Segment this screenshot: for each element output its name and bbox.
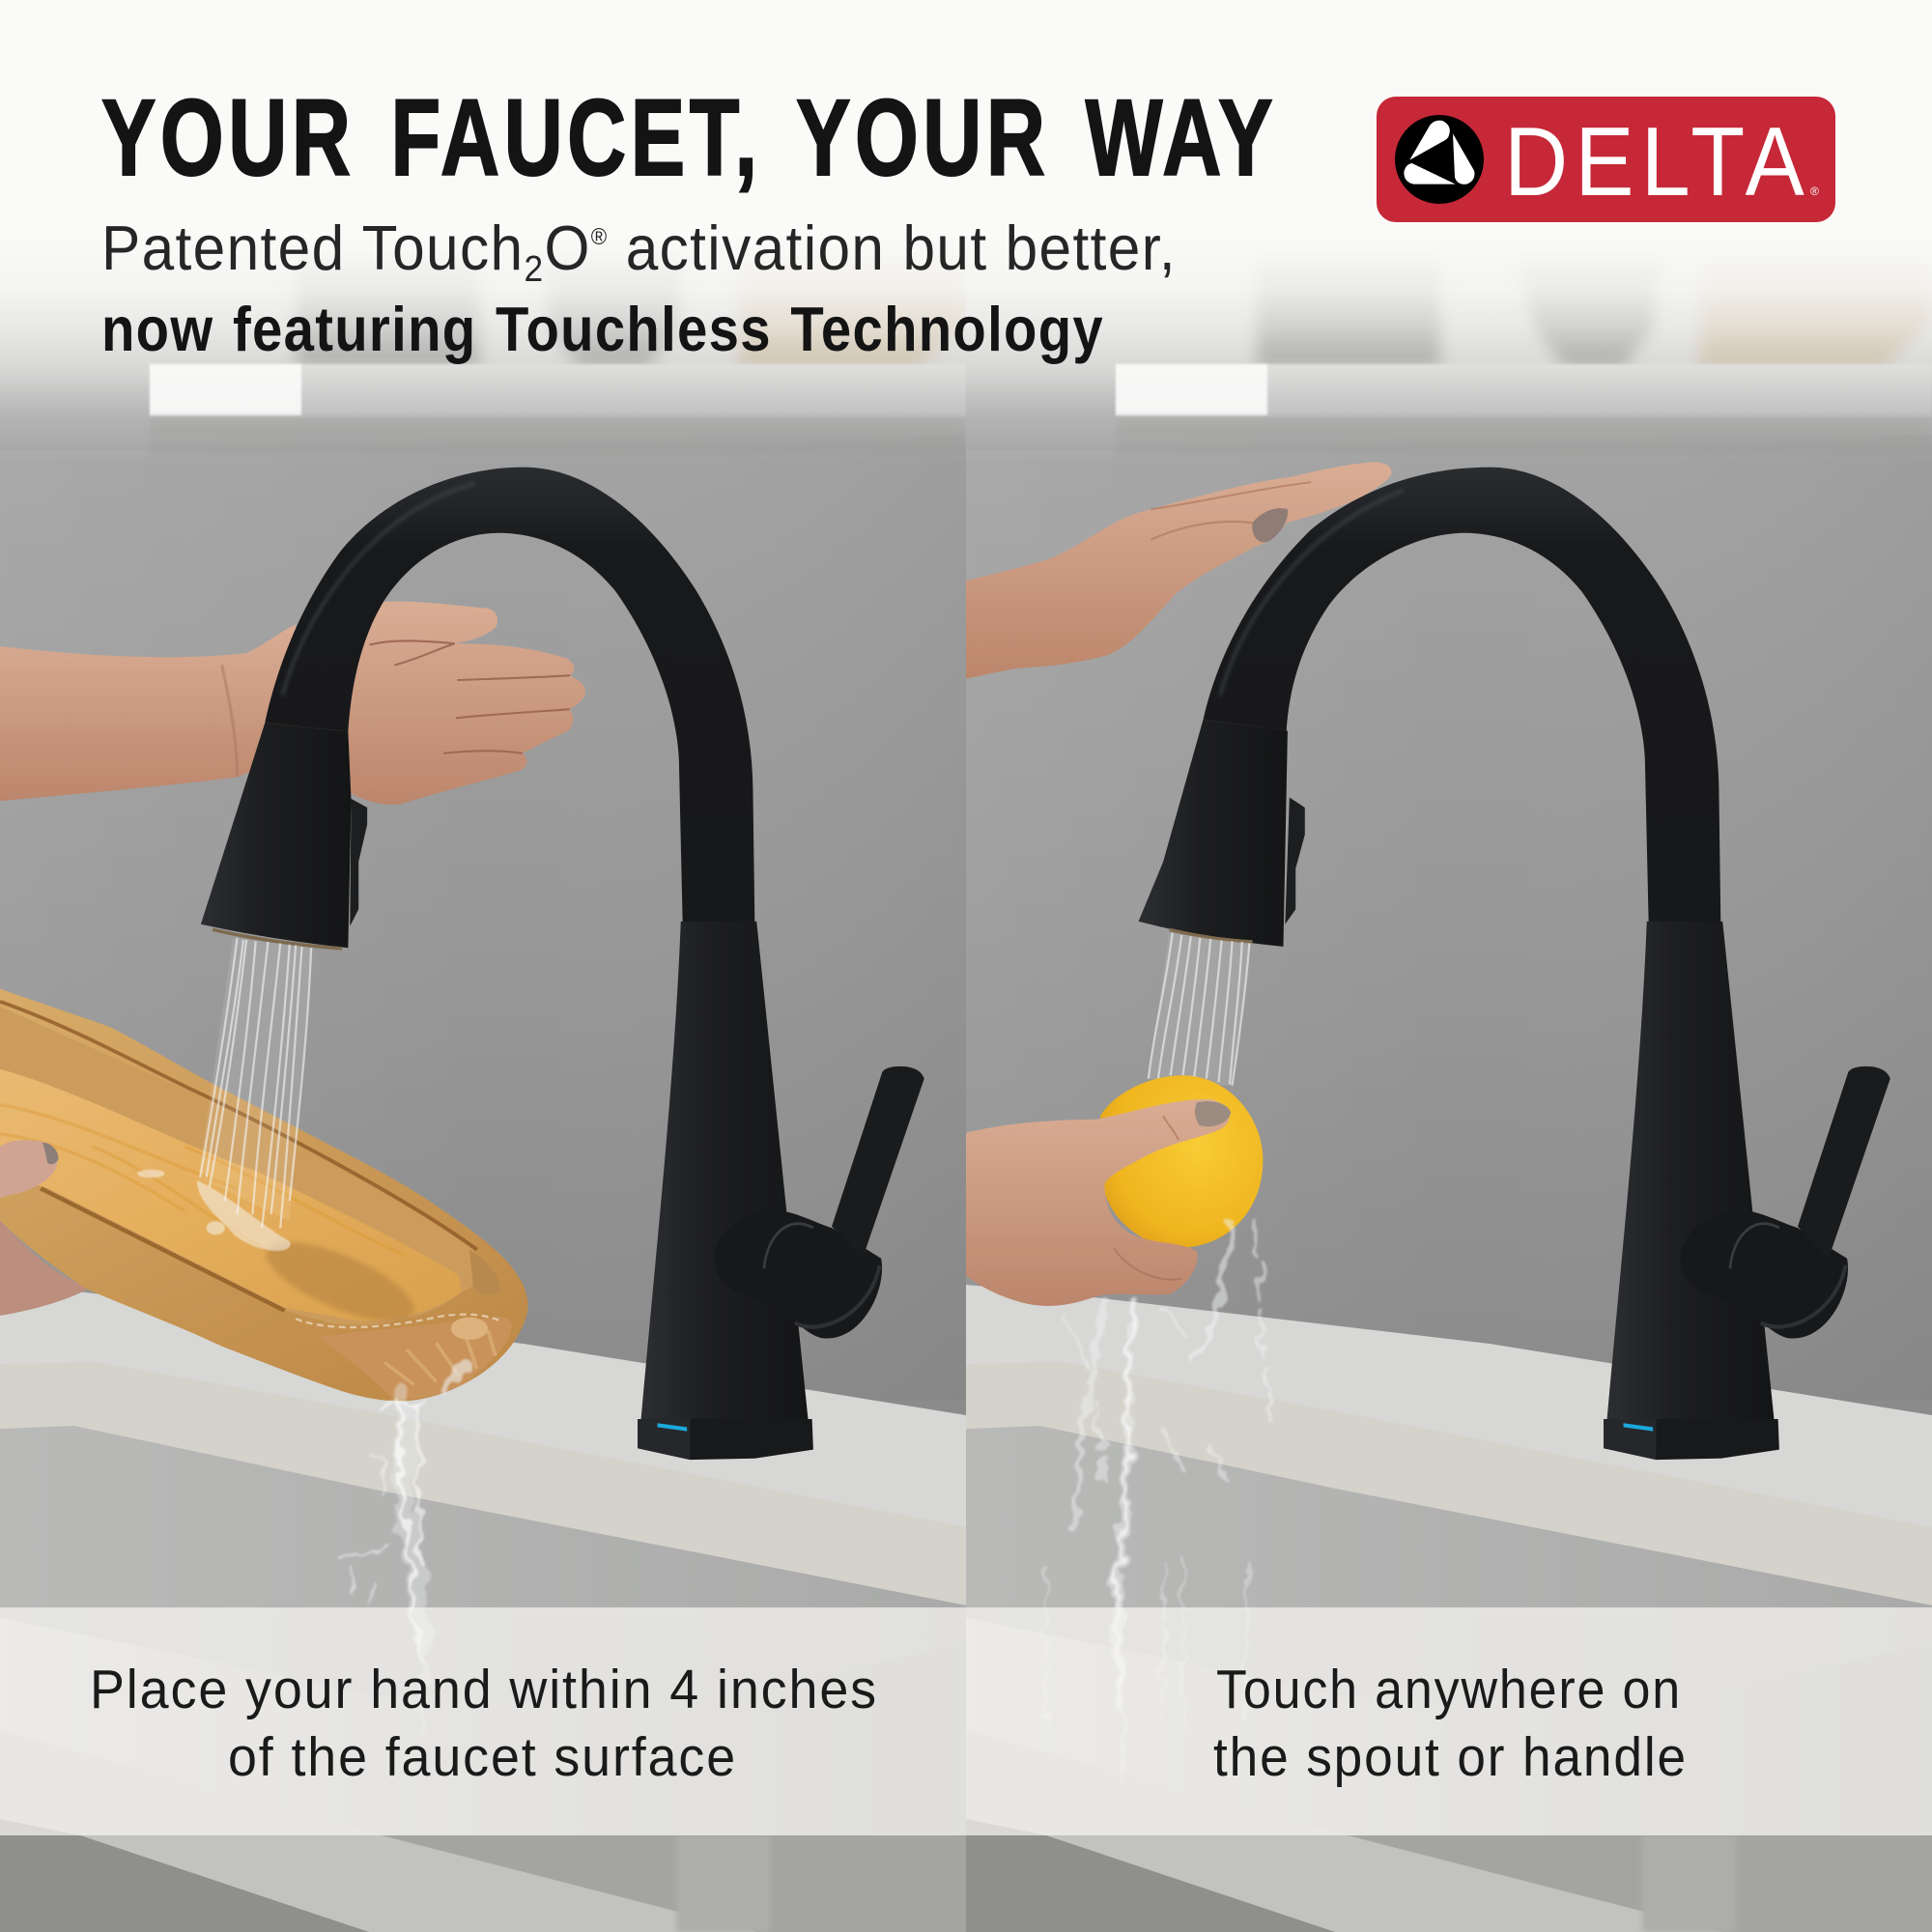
caption: left <box>90 1659 878 1788</box>
faucet: spout <box>1204 468 1720 924</box>
panel: right photo, hand touching spout and rinsing lemon <box>966 265 1932 1932</box>
faucet: base with status light <box>1604 1419 1779 1460</box>
subtitle: activation but better, <box>609 213 1177 283</box>
subtitle: Patented Touch <box>101 213 557 283</box>
top white fade behind header <box>0 0 1932 473</box>
panel: left photo, hand near faucet rinsing wooden board <box>0 267 966 1932</box>
wooden cutting board <box>0 989 528 1401</box>
caption: right <box>1213 1659 1688 1788</box>
water dripping from lemon <box>1046 1222 1267 1787</box>
kitchen background right <box>966 267 1932 1932</box>
water splash on board <box>137 1170 290 1251</box>
water falling off board <box>340 1367 464 1729</box>
subtitle: 2 <box>524 249 544 290</box>
caption: left: Place your hand within 4 inches <box>90 1659 878 1720</box>
logo red plate <box>1377 97 1835 222</box>
logo emblem <box>1395 115 1484 204</box>
faucet: handle <box>1681 1066 1890 1339</box>
title: YOUR FAUCET, YOUR WAY <box>101 77 1277 198</box>
faucet: body <box>640 922 809 1422</box>
hand under board <box>0 1221 89 1316</box>
Delta logo <box>1377 97 1835 222</box>
hand: open palm behind spout <box>0 601 585 805</box>
caption: right: Touch anywhere on <box>1216 1659 1682 1720</box>
hand touching spout <box>966 462 1392 679</box>
water stream from spray head <box>198 938 313 1228</box>
caption: right: the spout or handle <box>1213 1726 1688 1788</box>
subtitle: O <box>544 213 591 283</box>
subtitle: bold line: now featuring Touchless Technology <box>101 294 1104 364</box>
logo wordmark: DELTA <box>1504 108 1811 216</box>
faucet: pull-down spray head <box>201 723 367 949</box>
water stream from spray head <box>1148 933 1251 1086</box>
faucet: spout <box>265 468 754 924</box>
kitchen background left <box>0 267 966 1932</box>
faucet: body <box>1606 922 1775 1422</box>
logo registered mark: ® <box>1810 185 1819 198</box>
caption band: right <box>966 1607 1932 1835</box>
faucet: pull-down spray head <box>1139 720 1305 947</box>
caption band: left <box>0 1607 966 1835</box>
hand holding lemon <box>966 1099 1231 1306</box>
caption: left: of the faucet surface <box>228 1726 737 1788</box>
subtitle: ® <box>591 224 609 250</box>
lemon <box>1100 1075 1263 1248</box>
faucet: base with status light <box>638 1419 813 1460</box>
faucet: handle <box>763 1066 924 1339</box>
thumb on board <box>0 1140 59 1198</box>
